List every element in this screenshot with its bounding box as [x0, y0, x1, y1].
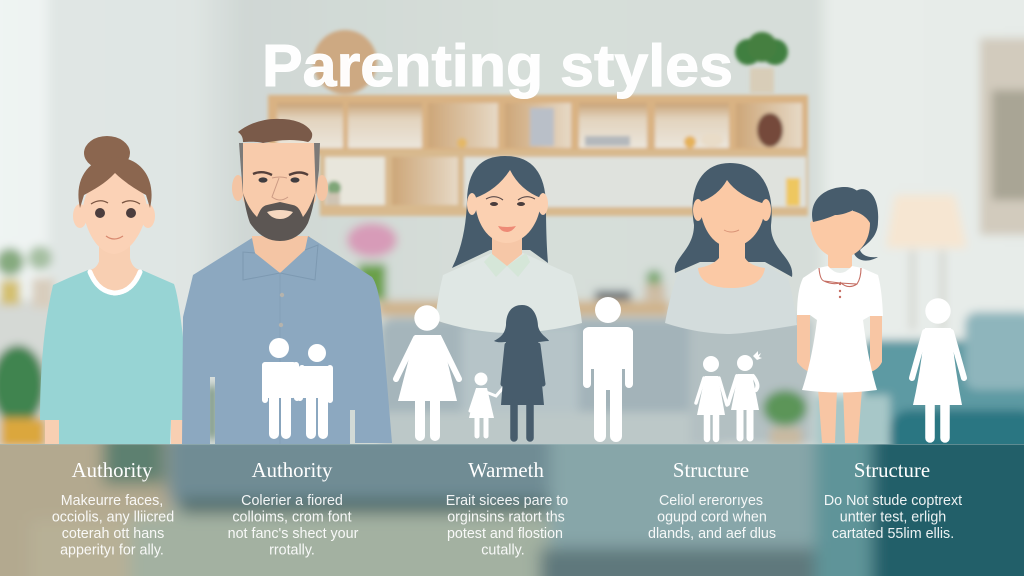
column: authority 2: Authority [252, 459, 333, 482]
column: structure 2: Structure [854, 459, 930, 482]
column: structure 1: Celiol ererorıyes [659, 493, 763, 509]
flowers [347, 223, 397, 300]
column: structure 2: untter test, erligh [840, 510, 946, 526]
title: Parenting styles [262, 33, 733, 99]
column: warmth: cutally. [481, 542, 525, 558]
picture frame [980, 38, 1024, 235]
wooden shelves [268, 95, 808, 216]
column: structure 1: Structure [673, 459, 749, 482]
column: structure 1: dlands, and aef dlus [648, 526, 776, 542]
column: authority 2: rrotally. [269, 542, 315, 558]
sideboard [378, 301, 670, 316]
column: structure 2 [824, 459, 962, 542]
figure: girl with ponytail in white dress [797, 187, 883, 443]
icon: two white figures on shirt [262, 338, 333, 434]
gray sofa [380, 318, 720, 454]
column: warmth: potest and flostion [447, 526, 563, 542]
column: authority 1 [52, 459, 174, 558]
teal sofa [815, 312, 1024, 470]
figure: woman with long dark hair and pale shirt [435, 156, 582, 333]
bottom information band [0, 430, 1024, 576]
figure: woman with bun in teal sweater [40, 136, 188, 444]
icon: small child holding hand [469, 372, 503, 436]
icon: dark silhouette woman [494, 305, 549, 438]
column: authority 1: coterah ott hans [62, 526, 164, 542]
small plant by sofa [763, 390, 807, 446]
figure: bearded man in blue shirt [182, 119, 392, 444]
column: warmth [446, 459, 568, 558]
column: structure 1: ogupd cord when [657, 510, 767, 526]
column: authority 1: Authority [72, 459, 153, 482]
column: warmth: orginsins ratort ths [447, 510, 565, 526]
icon: two small white figures [696, 351, 762, 439]
plants on left [0, 246, 216, 448]
column: authority 1: apperityı for ally. [60, 542, 164, 558]
column: warmth: Erait sicees pare to [446, 493, 568, 509]
column: structure 1 [648, 459, 776, 542]
floor lamp [886, 195, 967, 330]
figure: faceless woman with wavy hair [665, 163, 797, 334]
column: warmth: Warmeth [468, 459, 544, 482]
clock and shelf decor [268, 30, 808, 216]
plant on shelf [735, 32, 788, 93]
icon: white woman silhouette at right [912, 298, 964, 438]
column: authority 2: not fanc's shect your [228, 526, 359, 542]
icon: white woman in dress [396, 305, 459, 436]
column: authority 1: occiolis, any lliicred [52, 510, 174, 526]
column: authority 2 [228, 459, 359, 558]
column: authority 2: Colerier a fiored [241, 493, 343, 509]
icon: white man [583, 297, 633, 436]
column: structure 2: cartated 55lim ellis. [832, 526, 954, 542]
column: authority 2: colloims, crom font [232, 510, 352, 526]
column: structure 2: Do Not stude coptrext [824, 493, 962, 509]
column: authority 1: Makeurre faces, [61, 493, 163, 509]
